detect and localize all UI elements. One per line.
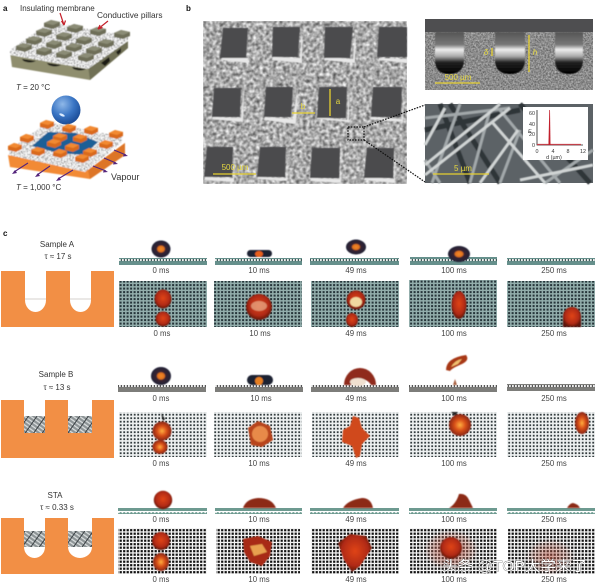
time labels: STA side: 250 ms (541, 515, 567, 524)
inset chart: fibre diameter distribution: 8 (566, 149, 570, 155)
dimension: delta (484, 48, 492, 57)
time labels: sample B top (153, 459, 567, 468)
schematic: sample B grooves with fibres (1, 400, 114, 458)
time labels: sample A top: 250 ms (541, 329, 567, 338)
top views: sample B (119, 412, 595, 458)
schematic: sample A grooves (1, 271, 114, 327)
pillars: square grid (204, 27, 407, 183)
label: 20 degrees: T = 20 °C (16, 83, 50, 92)
label: STA time: τ ≈ 0.33 s (40, 503, 74, 512)
time labels: sample A top: 0 ms (154, 329, 171, 338)
time labels: STA side: 100 ms (441, 515, 467, 524)
inset chart: fibre diameter distribution: 12 (580, 149, 586, 155)
label: conductive pillars: Conductive pillars (97, 10, 162, 20)
time labels: sample B side: 49 ms (345, 394, 367, 403)
arrows: escaping vapour (12, 150, 128, 181)
inset chart: fibre diameter distribution: d (µm) (546, 155, 562, 161)
time labels: sample B top: 0 ms (153, 459, 170, 468)
panel label c: c (3, 229, 8, 238)
panel b: SEM top view with pillars (203, 19, 593, 184)
droplets: STA top (152, 530, 574, 575)
dimension: h: h (533, 48, 538, 57)
label: sample A: Sample A (40, 240, 75, 249)
time labels: STA top (153, 575, 567, 584)
label: 1,000 degrees: T = 1,000 °C (16, 183, 61, 192)
watermark: 头条 @TOP大学来了 (442, 558, 587, 575)
inset chart: fibre diameter distribution: 60 (529, 111, 535, 117)
time labels: sample B side (153, 394, 567, 403)
side views: STA (118, 491, 595, 514)
inset chart: fibre diameter distribution: 4 (552, 149, 554, 155)
time labels: sample A side (153, 266, 567, 275)
scale bar: 500 micrometres cross-section (435, 73, 480, 83)
dimension: a (330, 89, 341, 116)
dimension: delta: δ (484, 48, 489, 57)
panel label b: b (186, 4, 191, 13)
droplets: sample B side (151, 355, 467, 386)
scale bar: 5 micrometres: 5 µm (454, 164, 472, 173)
time labels: sample B side: 0 ms (153, 394, 170, 403)
time labels: sample A top: 10 ms (249, 329, 271, 338)
side views: sample B (118, 355, 595, 392)
inset chart: fibre diameter distribution: 0 (532, 143, 535, 149)
droplets: sample A side (152, 240, 470, 262)
time labels: STA top: 250 ms (541, 575, 567, 584)
time labels: sample B top: 10 ms (248, 459, 270, 468)
droplets: STA side (154, 491, 580, 509)
panel label a: a (3, 4, 8, 13)
row: STA (1, 491, 595, 584)
time labels: sample A side: 250 ms (541, 266, 567, 275)
label: sample B time: τ ≈ 13 s (43, 383, 71, 392)
zoom box: dotted region (348, 105, 425, 182)
time labels: STA top: 100 ms (441, 575, 467, 584)
time labels: STA side: 49 ms (345, 515, 367, 524)
time labels: sample B side: 250 ms (541, 394, 567, 403)
scale bar: 5 micrometres (433, 164, 489, 174)
image: fibre close-up (425, 104, 593, 183)
label: insulating membrane: Insulating membrane (20, 4, 95, 13)
time labels: STA top: 49 ms (345, 575, 367, 584)
time labels: sample A top (154, 329, 567, 338)
schematic: room-temperature armour block (10, 20, 130, 80)
inset chart: fibre diameter distribution: 20 (529, 132, 535, 138)
inset chart: fibre diameter distribution: E (528, 129, 532, 135)
label: sample B: Sample B (39, 370, 73, 379)
time labels: sample A side: 49 ms (345, 266, 367, 275)
time labels: sample B top: 250 ms (541, 459, 567, 468)
top views: sample A (119, 280, 595, 327)
scale bar: 500 micrometres cross-section: 500 µm (445, 73, 472, 82)
arrow: insulating membrane (60, 13, 66, 25)
time labels: STA side: 10 ms (248, 515, 270, 524)
time labels: sample A top: 100 ms (441, 329, 467, 338)
image: cross-section of pillars (425, 19, 593, 90)
inset chart: fibre diameter distribution: 0 (536, 149, 538, 155)
schematic: STA grooves with fibres (1, 518, 114, 574)
time labels: sample A side: 100 ms (441, 266, 467, 275)
icon: blue droplet (52, 96, 80, 124)
time labels: sample A side: 10 ms (248, 266, 270, 275)
time labels: sample B side: 10 ms (250, 394, 272, 403)
panel a: structured surface schematics (8, 4, 162, 192)
dimension: h (529, 35, 538, 72)
label: sample A time: τ ≈ 17 s (44, 252, 72, 261)
row: Sample B (1, 355, 595, 468)
time labels: sample B side: 100 ms (441, 394, 467, 403)
row: Sample A (1, 240, 595, 338)
scale bar: 500 micrometres (213, 163, 256, 174)
arrow: conductive pillars (98, 21, 108, 29)
droplets: sample A top (154, 290, 581, 327)
inset chart: fibre diameter distribution: 40 (529, 122, 535, 128)
label: vapour: Vapour (111, 172, 139, 182)
top views: STA (118, 528, 595, 575)
time labels: STA side (153, 515, 567, 524)
time labels: sample B top: 100 ms (441, 459, 467, 468)
label: STA: STA (48, 491, 63, 500)
image: fibrous membrane background (203, 21, 407, 184)
droplets: sample B top (152, 412, 589, 458)
side views: sample A (119, 240, 595, 265)
time labels: STA top: 0 ms (153, 575, 170, 584)
time labels: sample B top: 49 ms (345, 459, 367, 468)
time labels: STA side: 0 ms (153, 515, 170, 524)
time labels: STA top: 10 ms (248, 575, 270, 584)
time labels: sample A top: 49 ms (345, 329, 367, 338)
dimension: a: a (336, 97, 341, 106)
inset chart: fibre diameter distribution (523, 107, 588, 161)
scale bar: 500 micrometres: 500 µm (222, 163, 249, 172)
schematic: high-temperature armour block (8, 120, 125, 179)
dimension: b: b (301, 102, 306, 111)
dimension: b (292, 102, 315, 113)
time labels: sample A side: 0 ms (153, 266, 170, 275)
